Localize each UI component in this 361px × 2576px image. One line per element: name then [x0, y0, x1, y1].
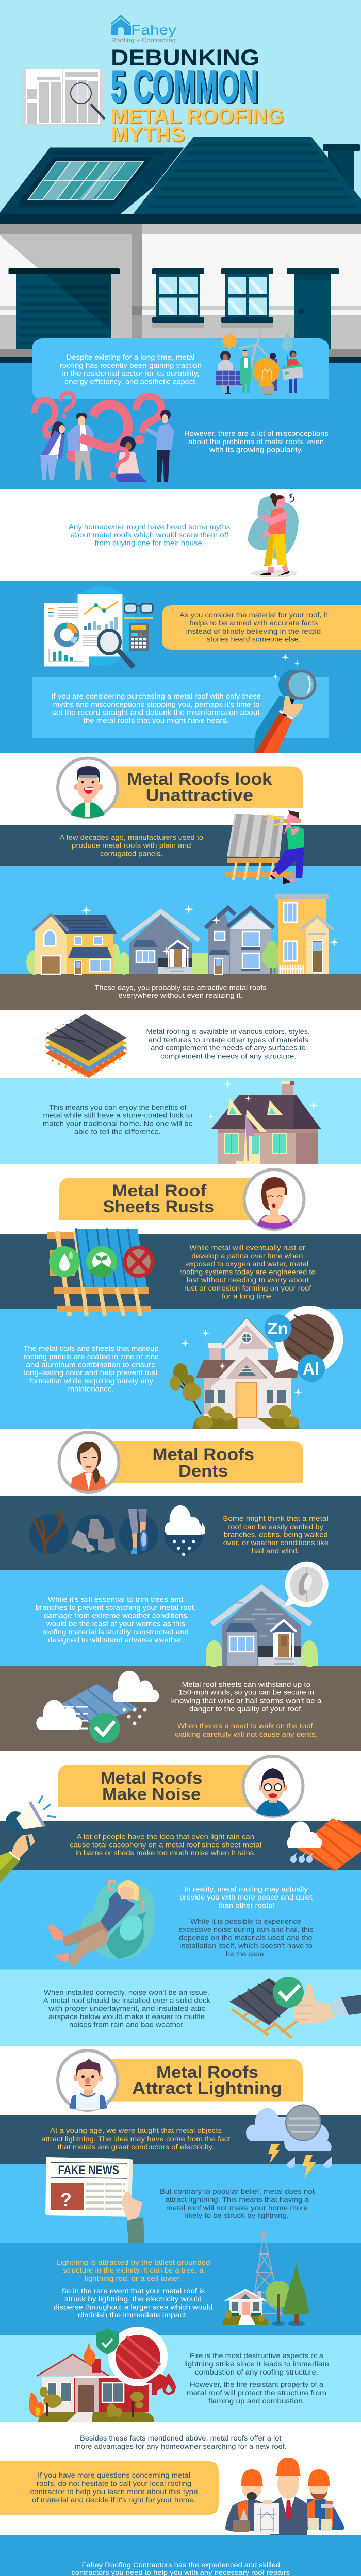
text block: material: helps to be armed with accurate facts [189, 619, 318, 627]
title: MYTHS [111, 124, 185, 146]
text block: zinc coating: long-lasting color and help prevent rust [24, 1369, 158, 1377]
text block: colors and styles: and textures to imitate other types of materials [149, 1036, 308, 1044]
panel: closing white [0, 2422, 361, 2535]
worker right [307, 2469, 344, 2531]
text block: stone-coated [43, 1104, 193, 1136]
illustration: hand holding magnifying glass [254, 670, 315, 753]
title text: Metal Roofs [156, 2063, 258, 2081]
text block: wind rating [171, 1681, 322, 1738]
text block: peace and quiet [178, 1885, 314, 1958]
panel: myth 3 header white [0, 1429, 361, 1496]
illustration: house with dent bubble [206, 1561, 329, 1667]
text block: tallest structure: So in the rare event that your metal roof is [61, 2287, 205, 2295]
text block: metal does not attract: attract lightning. This means that having a [165, 2196, 309, 2204]
text block: wind rating: walking carefully will not cause any dents. [174, 1731, 318, 1738]
text block: rust reality: develop a patina over time when [191, 1252, 303, 1260]
text block: debunk: set the record straight and debunk the misinformation about [52, 709, 260, 716]
illustration: renewable energy people [216, 330, 303, 395]
title: 5 COMMON [111, 61, 258, 112]
title: METAL ROOFING [111, 104, 284, 128]
logo: Fahey top [111, 15, 176, 44]
panel: myth 4 light blue [0, 1870, 361, 1969]
text block: fire: Fire is the most destructive aspects of a [190, 2352, 324, 2360]
text block: tallest structure: struck by lightning, the electricity would [64, 2295, 202, 2303]
panel: myth 3 brown [0, 1666, 361, 1751]
title text [153, 1445, 254, 1480]
illustration: neighbourhood houses [26, 894, 338, 975]
front door [287, 268, 339, 349]
text block: call to action: Fahey Roofing Contractors has the experienced and skilled [81, 2561, 280, 2569]
text block: correct installation: When installed correctly, noise won't be an issue. [44, 1989, 209, 1996]
text block: debunk: the metal roofs that you might have heard. [84, 717, 229, 724]
text block: these days [95, 984, 267, 999]
text block: rust reality: While metal will eventually rust or [189, 1244, 306, 1251]
text block: fire: combustion of any roofing structure. [195, 2368, 318, 2376]
text block: more advantages [75, 2434, 287, 2450]
panel: myth 5 dark band [0, 2115, 361, 2164]
text block: peace and quiet: While it is possible to experience [190, 1918, 301, 1925]
text block: metal does not attract: likely to be struck by lightning. [185, 2212, 289, 2219]
text block: contractor: If you have more questions concerning metal [38, 2471, 190, 2479]
bubble: red metal roof [108, 2327, 168, 2386]
text block: material: instead of blindly believing in the retold [186, 628, 321, 635]
text block: intro: energy efficiency, and aesthetic aspect. [64, 378, 198, 385]
text block: stone-coated: match your traditional home. No one will be [43, 1120, 193, 1128]
panel: sky [0, 0, 361, 227]
text block: wind rating: danger to the quality of your roof. [189, 1705, 303, 1713]
text block: homeowner myths: from buying one for their house. [95, 539, 204, 547]
panel: intro callout [32, 338, 329, 399]
icon: surprised woman avatar [244, 1170, 304, 1229]
illustration: fake news newspaper [45, 2157, 144, 2243]
small house [222, 2290, 269, 2325]
text block: metal and lightning: that metals are great conductors of electricity. [58, 2143, 214, 2151]
cell tower [251, 2231, 282, 2316]
icon: hail cloud [164, 1505, 205, 1556]
panel: myth 2 dark band [0, 1234, 361, 1309]
text block: material: As you consider the material for your roof, it [179, 611, 327, 619]
manager [254, 2458, 307, 2535]
text block: metal does not attract [160, 2188, 315, 2219]
text block: metal does not attract: But contrary to popular belief, metal does not [160, 2188, 315, 2195]
text block: rain noise [70, 1833, 261, 1857]
text block: correct installation [43, 1989, 210, 2029]
text block: trim trees: designed to withstand adverse weather. [48, 1636, 184, 1644]
heading: myth 4 [58, 1756, 303, 1816]
text block: peace and quiet: be the case. [226, 1950, 266, 1958]
text block: stone-coated: This means you can enjoy the benefits of [49, 1104, 187, 1111]
illustration: three contractors [225, 2458, 344, 2535]
illustration: woman relaxing on beanbag [47, 1880, 155, 1967]
illustration: storm clouds and metal disc [246, 2105, 332, 2178]
text block: wind rating: Metal roof sheets can withstand up to [182, 1681, 310, 1688]
text block: decades ago: A few decades ago, manufacturers used to [60, 834, 203, 841]
text block: misconceptions: with its growing popularity. [209, 446, 303, 453]
text block: intro: roofing has recently been gaining traction [60, 362, 202, 369]
icon: Al label: Al [303, 1359, 319, 1378]
panel: myth 2 light blue [0, 1309, 361, 1429]
main roof [0, 137, 361, 224]
illustration: orange roof with rain cloud [287, 1818, 361, 1871]
house [37, 2354, 154, 2422]
text block: stone-coated: able to tell the difference. [74, 1128, 161, 1136]
text block: dent worries: branches, debris, being walked [224, 1531, 328, 1539]
panel: myth 4 dark band [0, 1821, 361, 1870]
panel: debunk callout [32, 677, 329, 738]
text block: peace and quiet: than other roofs! [218, 1902, 274, 1909]
text block: contractor [30, 2471, 198, 2504]
heading: myth 3 [59, 1432, 303, 1492]
panel: facts blue [0, 581, 361, 753]
title text: Sheets Rusts [103, 1197, 214, 1216]
cloud left [36, 1700, 87, 1730]
title text [127, 770, 272, 805]
title text: Metal Roofs [101, 1769, 202, 1787]
panel: neighbourhood brown ground [0, 974, 361, 1010]
text block: peace and quiet: depends on the materials used and the [179, 1934, 313, 1942]
icon: megaphone and hand [0, 1795, 56, 1883]
text block: more advantages: Besides these facts mentioned above, metal roofs offer a lot [80, 2434, 282, 2442]
icon: check [89, 1713, 120, 1743]
text block: fire: lightning strike since it leads to immediate [184, 2360, 329, 2368]
text block: contractor: contractor to help you learn more about this type [30, 2488, 198, 2496]
text block: metal and lightning: At a young age, we were taught that metal objects [50, 2127, 222, 2134]
text block: wind rating: When there's a need to walk on the roof, [177, 1722, 315, 1730]
text block: rain noise: A lot of people have the idea that even light rain can [77, 1833, 254, 1841]
text block: contractor: roofs, do not hesitate to call your local roofing [37, 2480, 191, 2487]
text block: dent worries: roof can be easily dented by [228, 1523, 323, 1531]
bubble: dent close-up [284, 1561, 329, 1607]
text block: peace and quiet: excessive noise during rain and hail, this [178, 1926, 314, 1934]
title [111, 45, 285, 147]
text block: debunk [52, 692, 261, 724]
illustration: hero house [0, 137, 361, 363]
text block: wind rating: knowing that wind or hail storms won't be a [171, 1697, 322, 1705]
title: MYTHS [112, 125, 186, 147]
text block: colors and styles: complement the needs of any structure. [160, 1052, 296, 1060]
text block: trim trees: roofing material is sturdily constructed and [42, 1628, 189, 1636]
text block: homeowner myths: about metal roofs which would scare them off [71, 531, 228, 539]
icon: branch [29, 1511, 69, 1554]
icon: Al label [298, 1354, 325, 1382]
headline: FAKE NEWS [58, 2163, 119, 2177]
illustration: worried woman [248, 493, 299, 577]
text block: contractor: of material and decide if it's right for your home. [32, 2496, 196, 2504]
text block: colors and styles: Metal roofing is available in various colors, styles, [146, 1028, 310, 1036]
text block: tallest structure: disperse throughout a larger area which would [54, 2303, 212, 2311]
text block: fire: flaming up and combustion. [208, 2397, 305, 2405]
text block: dent worries [223, 1515, 329, 1555]
text block: more advantages: more advantages for any homeowner searching for a new roof. [75, 2443, 287, 2450]
line chart [84, 602, 118, 614]
text block: zinc coating: formation while requiring barely any [29, 1377, 153, 1385]
text block: zinc coating: and aluminum combination to ensure [26, 1361, 156, 1369]
person: man in jacket [67, 413, 94, 480]
text block: dent worries: over, or weather conditions like [223, 1539, 329, 1547]
magnifier [99, 630, 134, 667]
title: METAL ROOFING [112, 105, 285, 129]
text block: decades ago: corrugated panels. [100, 850, 163, 857]
text block: correct installation: with proper underlayment, and insulated attic [48, 2005, 205, 2012]
text block: peace and quiet: provide you with more peace and quiet [179, 1893, 313, 1901]
text block: tallest structure: diminish the immediate impact. [78, 2311, 188, 2319]
text block: trim trees [36, 1596, 196, 1644]
panel: myth 5 pale blue [0, 2335, 361, 2422]
panel: myth 2 header white [0, 1164, 361, 1234]
text block: correct installation: A metal roof should be installed over a solid deck [43, 1997, 210, 2004]
text block: metal and lightning [41, 2127, 231, 2151]
text block: colors and styles: and complement the needs of any surfaces to [151, 1044, 306, 1052]
title text [132, 2063, 282, 2097]
text block: debunk: myths and misconceptions stopping you, perhaps it's time to [53, 701, 260, 708]
heading: myth 2 [59, 1170, 304, 1229]
illustration: fire-resistant red house [29, 2327, 176, 2422]
panel: myth 1 header white [0, 753, 361, 825]
text block: peace and quiet: In reality, metal roofing may actually [184, 1885, 308, 1893]
icon: seedling badge [86, 1246, 117, 1278]
panel: neighbourhood light blue [0, 866, 361, 974]
text block: metal and lightning: attract lightning. The idea may have come from the fact [41, 2135, 231, 2143]
text block: rain noise: cause total cacophony on a metal roof since sheet metal [70, 1841, 261, 1849]
panel: colours white [0, 1010, 361, 1078]
text block: correct installation: airspace below would make it easier to muffle [48, 2013, 205, 2021]
window right [221, 268, 273, 328]
icon: man with glasses avatar [243, 1756, 303, 1816]
title text: Dents [178, 1462, 228, 1480]
bubble: roof close-up [275, 1306, 343, 1374]
illustration: thumbs up on metal roof [229, 1977, 361, 2038]
house: gray with porch [122, 911, 208, 974]
text block: material [179, 611, 327, 643]
heading: myth 1 [58, 758, 303, 818]
person: man right [145, 410, 174, 482]
illustration: man with corrugated panel [225, 810, 304, 884]
icon: rocks [71, 1514, 116, 1554]
panel: call to action blue [0, 2535, 361, 2576]
illustration: confused people with question marks [35, 393, 174, 482]
glasses [125, 604, 153, 613]
icon: Zn label [264, 1315, 292, 1342]
text block: colors and styles [146, 1028, 310, 1060]
panel: myth 3 light blue [0, 1570, 361, 1666]
icon: Zn label: Zn [267, 1319, 288, 1338]
text block: fire: However, the fire-resistant property of a [190, 2381, 324, 2388]
text block: zinc coating: The metal coils and sheets that makeup [24, 1345, 159, 1352]
window left [152, 268, 204, 328]
text block: dent worries: Some might think that a metal [223, 1515, 329, 1522]
text block: dent worries: hail and wind. [252, 1547, 300, 1555]
question marks [35, 393, 161, 448]
text block: stone-coated: metal while still have a stone-coated look to [43, 1112, 192, 1120]
text block: misconceptions: about the problems of metal roofs, even [188, 438, 324, 446]
illustration: roof framing with blue sheet and badges [47, 1228, 155, 1316]
illustration: fake news newspaper: ? [60, 2189, 72, 2210]
text block: material: stories heard someone else. [207, 636, 301, 643]
panel: stone-coated pale blue [0, 1078, 361, 1164]
text block: homeowner myths: Any homeowner might have heard some myths [69, 523, 231, 531]
text block: rust reality: exposed to oxygen and water, metal [186, 1260, 308, 1268]
panel: intro blue [0, 363, 361, 489]
sparkles [81, 904, 338, 956]
icon: young man avatar [58, 2050, 118, 2110]
chimney [323, 144, 360, 202]
icons: sparkles near magnifier [272, 654, 300, 680]
text block: debunk: If you are considering purchasing a metal roof with only these [52, 692, 261, 700]
panel: contractor callout [0, 2461, 219, 2515]
text block: rust reality: for a long time. [222, 1293, 273, 1300]
text block: peace and quiet: installation itself, which doesn't have to [179, 1942, 313, 1950]
bar charts [49, 617, 118, 662]
icon: running legs [119, 1509, 158, 1554]
text block: intro [60, 353, 202, 385]
illustration: house with zinc and aluminium coating [170, 1306, 343, 1429]
text block: misconceptions [184, 430, 329, 453]
panel: myth 5 blue [0, 2243, 361, 2335]
text block: trim trees: damage from extreme weather conditions [44, 1612, 187, 1620]
panel: homeowner white [0, 489, 361, 581]
title text [101, 1769, 202, 1804]
panel: material callout [162, 605, 361, 650]
text block: tallest structure [54, 2259, 212, 2319]
text block: fire [184, 2352, 329, 2405]
panel: myth 4 header white [0, 1751, 361, 1821]
text block: intro: in the residential sector for its durability, [62, 370, 199, 378]
text block: tallest structure: Lightning is attracted by the tallest grounded [56, 2259, 210, 2266]
title text: Make Noise [102, 1785, 201, 1804]
house: slate two storey [205, 908, 274, 974]
icon: rust crossed badge [123, 1246, 155, 1278]
text block: these days: everywhere without even realizing it. [119, 992, 242, 999]
panel: myth 5 header white [0, 2046, 361, 2115]
text block: trim trees: would be the least of your worries as this [46, 1620, 185, 1628]
text block: zinc coating: maintenance. [68, 1385, 114, 1393]
text block: decades ago [60, 834, 203, 857]
cloud right [113, 1671, 159, 1702]
title text [103, 1181, 214, 1216]
calculator [129, 623, 149, 651]
icon: shield [96, 2328, 119, 2354]
logo: Fahey top: Roofing + Contracting [111, 38, 176, 44]
text block: rust reality: roofing systems today are engineered to [179, 1268, 316, 1276]
text block: rain noise: in barns or sheds make too much noise when it rains. [75, 1849, 256, 1857]
title text: Metal Roofs look [127, 770, 272, 788]
text block: intro: Despite existing for a long time, metal [67, 353, 195, 361]
house walls [0, 224, 361, 363]
tree [262, 941, 282, 974]
person: woman left [39, 421, 65, 480]
icons: causes of dents [29, 1505, 205, 1556]
garage door [8, 268, 120, 349]
illustration: stacked metal roof sheets [45, 1014, 127, 1078]
icon: house [111, 15, 131, 35]
icon: water drop badge [49, 1246, 80, 1277]
text block: zinc coating [24, 1345, 159, 1393]
title: DEBUNKING [111, 45, 259, 70]
text block: rust reality: last without needing to worry about [187, 1276, 309, 1284]
person: surprised man [270, 810, 304, 884]
illustration: stone-coated house [207, 1080, 321, 1164]
house: tall yellow [275, 894, 333, 974]
house: yellow [26, 914, 130, 975]
worker left [225, 2469, 264, 2532]
icon: newspaper and magnifier [23, 69, 105, 126]
title text: Unattractive [146, 786, 253, 805]
title text: Metal Roofs [153, 1445, 254, 1464]
icon: shocked man avatar [58, 758, 118, 818]
illustration: charts and magnifier [44, 586, 153, 667]
title: 5 COMMON [112, 62, 259, 113]
text block: metal does not attract: metal roof will not make your home more [166, 2204, 308, 2212]
icon: check [273, 1977, 304, 2008]
text block: misconceptions: However, there are a lot of misconceptions [184, 430, 329, 437]
text block: rust reality: rust or corrosion forming on your roof [184, 1284, 311, 1292]
text block: tallest structure: lightning rod, or a cell tower. [85, 2275, 182, 2282]
panel: myth 3 dark band [0, 1496, 361, 1570]
flames and bushes [29, 2342, 144, 2417]
illustration: roof sheet in storm with check [36, 1671, 159, 1743]
text block: wind rating: 150-mph winds, so you can be secure in [178, 1689, 314, 1697]
text block: these days: These days, you probably see attractive metal roofs [95, 984, 267, 991]
donut chart [57, 623, 78, 644]
panel: myth 4 pale blue [0, 1969, 361, 2046]
text block: rust reality [179, 1244, 316, 1300]
icon: worried woman avatar [59, 1432, 119, 1492]
text block: homeowner myths [69, 523, 231, 547]
illustration: tower, trees and small house [222, 2231, 309, 2326]
text block: tallest structure: structure in the vicinity. It can be a tree, a [63, 2266, 204, 2274]
tree [170, 1363, 201, 1414]
text block: fire: metal roof will protect the structure from [187, 2389, 326, 2397]
logo: Fahey top: Fahey [131, 22, 176, 38]
panel: myth 1 dark band [0, 825, 361, 866]
person: kneeling woman [110, 436, 147, 482]
text block: call to action [67, 2561, 294, 2576]
left roof with solar panel [0, 147, 184, 214]
title text: Metal Roof [112, 1181, 207, 1200]
panel: myth 5 light blue [0, 2164, 361, 2243]
text block: zinc coating: roofing panels are coated in zinc or zinc [24, 1353, 159, 1361]
icon: house with flame [146, 2373, 176, 2395]
title text: Attract Lightning [132, 2079, 282, 2097]
text block: trim trees: branches to prevent scratching your metal roof, [36, 1604, 196, 1612]
text block: decades ago: produce metal roofs with plain and [72, 842, 191, 850]
text block: trim trees: While it's still essential to trim trees and [48, 1596, 183, 1603]
heading: myth 5 [58, 2050, 303, 2110]
text block: correct installation: noises from rain and bad weather. [69, 2021, 185, 2029]
